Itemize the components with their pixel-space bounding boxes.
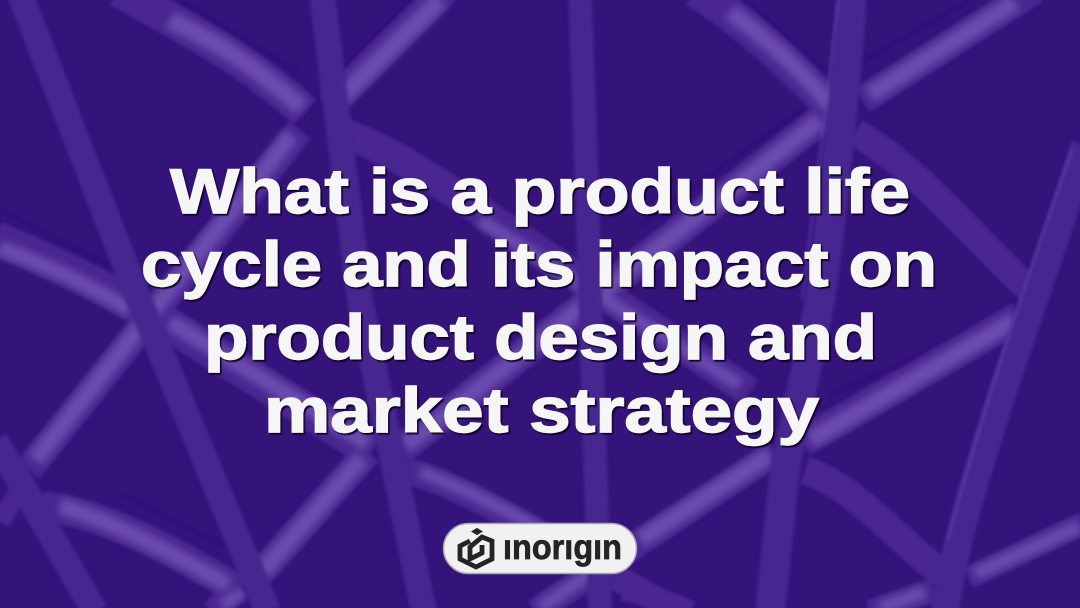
icon: inorigin cube mark [460,528,492,567]
title: product design and [204,303,877,373]
title [141,157,937,446]
title: cycle and its impact on [141,230,937,300]
title: market strategy [264,376,819,446]
logo wordmark: inorigin [503,528,622,567]
logo badge [444,524,636,574]
title: What is a product life [170,157,910,227]
